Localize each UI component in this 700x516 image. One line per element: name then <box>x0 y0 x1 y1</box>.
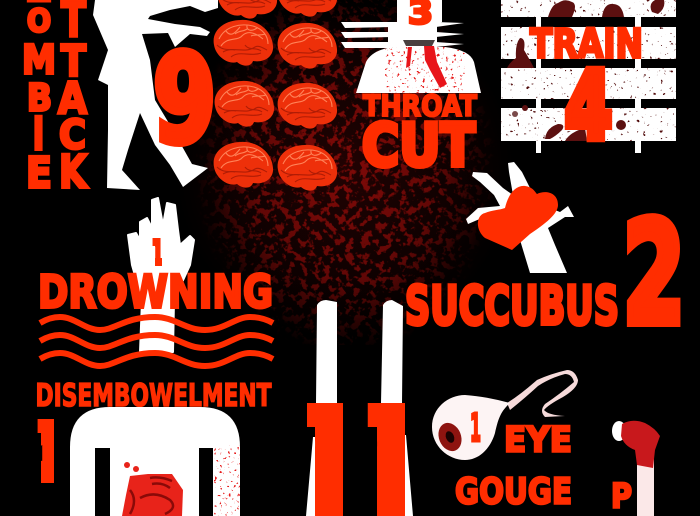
heading: zombie (vertical): O <box>27 4 51 40</box>
heading: attack (vertical): K <box>59 146 89 198</box>
icon: throat cut figure <box>341 0 481 93</box>
icon: succubus hand <box>466 162 574 273</box>
icon: iris <box>434 419 466 455</box>
heading: p: P <box>611 476 632 516</box>
heading: cut: CUT <box>362 110 475 180</box>
icon: left knife <box>306 300 337 516</box>
heading: zombie (vertical): B <box>27 76 52 120</box>
heading: disembowelment: DISEMBOWELMENT <box>36 378 272 414</box>
heading: drowning: DROWNING <box>38 266 273 318</box>
text: 1 <box>152 231 163 275</box>
blood splatter background <box>196 0 494 345</box>
heading: attack (vertical): T <box>61 38 86 86</box>
heading: train: TRAIN <box>530 22 643 68</box>
heading: zombie (vertical): E <box>26 150 52 198</box>
heading: throat: THROAT <box>363 89 477 123</box>
icon: right knife <box>381 300 413 516</box>
zombie silhouette <box>93 0 218 190</box>
icon: eyeball with nerve <box>432 370 578 460</box>
icon: waves <box>40 317 273 366</box>
icon: organ <box>122 462 183 516</box>
icon: heart <box>478 186 558 250</box>
icon: train tracks panel <box>501 0 676 153</box>
text: 1 <box>38 404 57 504</box>
heading: gouge: GOUGE <box>455 472 572 512</box>
number: 11: 1 <box>372 383 410 505</box>
icon: drowning hand <box>128 198 194 352</box>
heading: eye: EYE <box>504 420 572 460</box>
number: 9: 9 <box>153 30 216 170</box>
brains icon group <box>214 0 337 191</box>
heading: attack (vertical): C <box>59 112 86 158</box>
text: 1 <box>470 406 481 450</box>
heading: attack (vertical) <box>58 0 89 198</box>
number: 11 <box>307 403 405 516</box>
heading: zombie (vertical): M <box>22 38 56 84</box>
icon: severed limb <box>612 421 660 516</box>
number shape: white zero with organ <box>70 407 240 516</box>
heading: attack (vertical): A <box>58 74 87 124</box>
heading: zombie (vertical): I <box>32 108 44 160</box>
number: 11: 1 <box>310 383 348 505</box>
number: 4: 4 <box>565 52 612 160</box>
heading: zombie (vertical) <box>22 0 56 198</box>
